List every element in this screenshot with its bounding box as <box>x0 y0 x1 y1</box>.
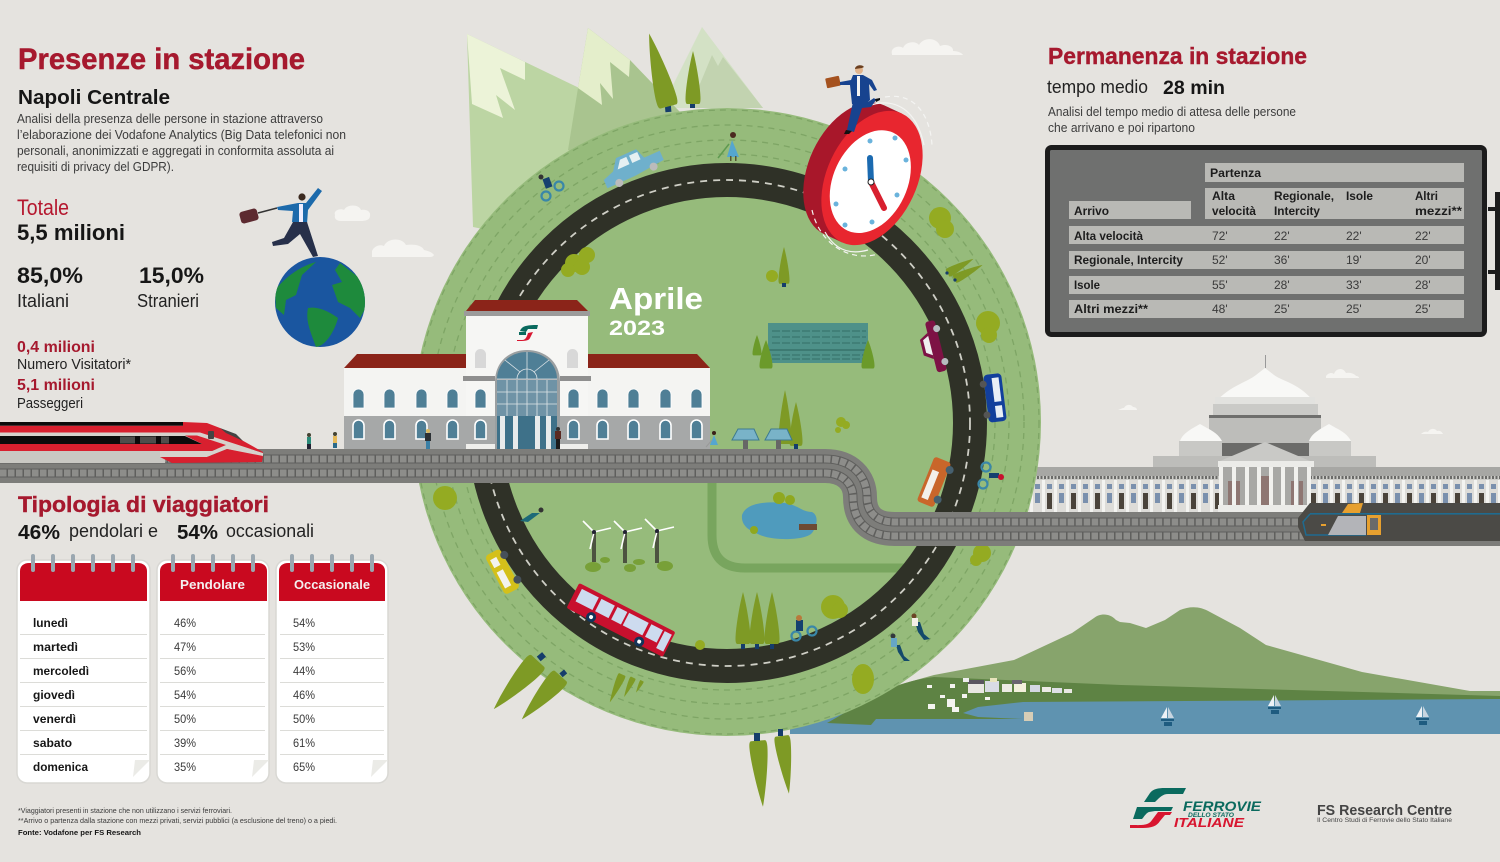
trees <box>486 31 985 807</box>
departures board table: 55' <box>1212 278 1228 292</box>
departures board table: 22' <box>1346 229 1362 243</box>
heading: Permanenza in stazione <box>1047 43 1307 135</box>
railway track <box>0 459 1500 536</box>
clock <box>783 86 943 261</box>
totals: Stranieri <box>137 291 199 311</box>
calendar: days: sabato <box>33 736 72 750</box>
heading: Permanenza in stazione: Analisi del tempo medio di attesa delle persone <box>1048 105 1296 119</box>
logo: FS Research Centre: Il Centro Studi di Ferrovie dello Stato Italiane <box>1317 818 1453 824</box>
globe <box>275 257 370 347</box>
station description <box>17 87 346 174</box>
logo: Ferrovie dello Stato Italiane <box>1130 788 1262 830</box>
departures board table: Arrivo <box>1074 206 1109 218</box>
departures board table: velocità <box>1212 206 1257 218</box>
departures board table: 28' <box>1415 278 1431 292</box>
Piazza del Plebiscito basilica <box>1030 355 1500 513</box>
totals: 5,5 milioni <box>17 220 125 245</box>
footnotes <box>18 806 337 837</box>
station description: requisiti di privacy del GDPR). <box>17 160 174 174</box>
calendar: days: domenica <box>33 760 88 774</box>
Napoli Centrale station building <box>344 300 710 449</box>
calendar: Pendolare: 35% <box>174 760 196 774</box>
departures board table: Alta velocità <box>1074 231 1144 243</box>
departures board table: 19' <box>1346 253 1362 267</box>
path and pond <box>712 483 905 568</box>
calendar: Occasionale: 46% <box>293 688 315 702</box>
departures board table: Altri mezzi** <box>1074 304 1149 316</box>
mountains behind the circle <box>467 27 763 260</box>
heading: Permanenza in stazione: Permanenza in stazione <box>1048 43 1307 69</box>
calendar: Occasionale: 53% <box>293 640 315 654</box>
calendar: Occasionale: Occasionale <box>294 577 370 592</box>
calendar: Occasionale <box>276 554 388 783</box>
departures board table: 52' <box>1212 253 1228 267</box>
totals <box>17 195 204 311</box>
calendar: days: venerdì <box>33 712 76 726</box>
yellow car <box>485 546 525 595</box>
footnotes: **Arrivo o partenza dalla stazione con mezzi privati, servizi pubblici (a esclusione del treno) o a piedi. <box>18 816 337 825</box>
heading: Tipologia di viaggiatori: 46% <box>18 522 60 544</box>
heading: Tipologia di viaggiatori <box>18 492 314 544</box>
logo: Ferrovie dello Stato Italiane: ITALIANE <box>1174 815 1244 830</box>
blue van <box>979 373 1007 423</box>
town <box>927 678 1072 721</box>
calendar: days: giovedì <box>33 688 75 702</box>
calendar: Occasionale: 61% <box>293 736 315 750</box>
departures board table: Regionale, <box>1274 191 1334 203</box>
businessman running on clock <box>825 65 880 134</box>
station description: personali, anonimizzati e aggregati in conformita assoluta ai <box>17 144 334 158</box>
heading: Tipologia di viaggiatori: occasionali <box>226 521 314 541</box>
calendar: Pendolare: Pendolare <box>180 577 245 592</box>
calendar: Pendolare: 54% <box>174 688 196 702</box>
calendar: Pendolare: 50% <box>174 712 196 726</box>
departures board table <box>1048 148 1500 334</box>
calendar: Pendolare: 39% <box>174 736 196 750</box>
totals: Italiani <box>17 291 69 311</box>
heading: Tipologia di viaggiatori: Tipologia di viaggiatori <box>18 492 269 517</box>
month label: 2023 <box>609 317 665 340</box>
departures board table: Regionale, Intercity <box>1074 255 1184 267</box>
departures board table: 20' <box>1415 253 1431 267</box>
departures board table: 48' <box>1212 302 1228 316</box>
calendar: days: martedì <box>33 640 78 654</box>
man running with suitcase on globe <box>239 188 322 257</box>
heading: Permanenza in stazione: tempo medio <box>1047 77 1148 97</box>
station description: Napoli Centrale <box>18 87 170 109</box>
heading: Permanenza in stazione: che arrivano e poi ripartono <box>1048 121 1195 135</box>
calendar: Occasionale: 50% <box>293 712 315 726</box>
heading: Tipologia di viaggiatori: 54% <box>177 522 218 544</box>
footnotes: *Viaggiatori presenti in stazione che non utilizzano i servizi ferroviari. <box>18 806 232 815</box>
departures board table: Intercity <box>1274 206 1321 218</box>
visitors and passengers <box>17 339 131 412</box>
visitors and passengers: 0,4 milioni <box>17 339 95 356</box>
FS mark on station <box>517 325 538 341</box>
departures board table: Altri <box>1415 191 1438 203</box>
calendar: Occasionale: 54% <box>293 616 315 630</box>
heading: Presenze in stazione: Presenze in stazione <box>18 43 305 76</box>
departures board table: Isole <box>1074 280 1100 292</box>
logo: Ferrovie dello Stato Italiane: FERROVIE <box>1183 798 1262 814</box>
bushes <box>433 207 1000 694</box>
road <box>484 180 970 666</box>
calendar: days: mercoledì <box>33 664 89 678</box>
departures board table: 33' <box>1346 278 1362 292</box>
departures board table: Isole <box>1346 191 1373 203</box>
station description: l’elaborazione dei Vodafone Analytics (Big Data telefonici non <box>17 128 346 142</box>
departures board table: mezzi** <box>1415 206 1463 218</box>
orange van <box>917 456 956 509</box>
calendar: Pendolare: 56% <box>174 664 196 678</box>
departures board table: 22' <box>1274 229 1290 243</box>
departures board table: 25' <box>1346 302 1362 316</box>
green circle landscape <box>413 108 1041 736</box>
cyclists and people in the park <box>520 132 1004 661</box>
calendar: Pendolare: 46% <box>174 616 196 630</box>
clouds <box>335 39 1443 434</box>
sailboats <box>1161 695 1429 726</box>
departures board table: Alta <box>1212 191 1236 203</box>
wind turbines <box>583 519 674 572</box>
small solar panels <box>732 429 792 449</box>
departures board table: 25' <box>1415 302 1431 316</box>
calendar: days <box>17 554 150 783</box>
departures board table: 22' <box>1415 229 1431 243</box>
left high-speed train <box>0 422 263 463</box>
station arch <box>495 350 560 449</box>
station description: Analisi della presenza delle persone in stazione attraverso <box>17 112 323 126</box>
footnotes: Fonte: Vodafone per FS Research <box>18 828 141 837</box>
visitors and passengers: 5,1 milioni <box>17 377 95 394</box>
logo: FS Research Centre: FS Research Centre <box>1317 803 1452 819</box>
departures board table: Partenza <box>1210 168 1262 180</box>
totals: Totale <box>17 195 69 220</box>
logo: Ferrovie dello Stato Italiane: DELLO STATO <box>1188 813 1234 819</box>
calendar: Pendolare <box>157 554 269 783</box>
departures board table: 72' <box>1212 229 1228 243</box>
calendar: Occasionale: 65% <box>293 760 315 774</box>
red bus <box>566 583 675 659</box>
visitors and passengers: Numero Visitatori* <box>17 356 131 373</box>
totals: 15,0% <box>139 263 204 288</box>
heading: Permanenza in stazione: 28 min <box>1163 78 1225 99</box>
solar building <box>752 323 874 369</box>
heading: Tipologia di viaggiatori: pendolari e <box>69 521 158 541</box>
blue pickup <box>598 141 667 192</box>
calendar: Occasionale: 44% <box>293 664 315 678</box>
Vesuvius and bay of Naples <box>790 607 1500 734</box>
calendar: days: lunedì <box>33 616 68 630</box>
right regional train <box>1298 503 1500 541</box>
departures board table: 25' <box>1274 302 1290 316</box>
station windows <box>353 389 702 439</box>
maroon car <box>916 319 950 375</box>
departures board table: 28' <box>1274 278 1290 292</box>
month label: Aprile <box>609 281 703 316</box>
month label <box>609 281 703 340</box>
departures board table: 36' <box>1274 253 1290 267</box>
totals: 85,0% <box>17 263 83 288</box>
calendar: Pendolare: 47% <box>174 640 196 654</box>
visitors and passengers: Passeggeri <box>17 395 83 412</box>
people at the station <box>307 427 718 449</box>
